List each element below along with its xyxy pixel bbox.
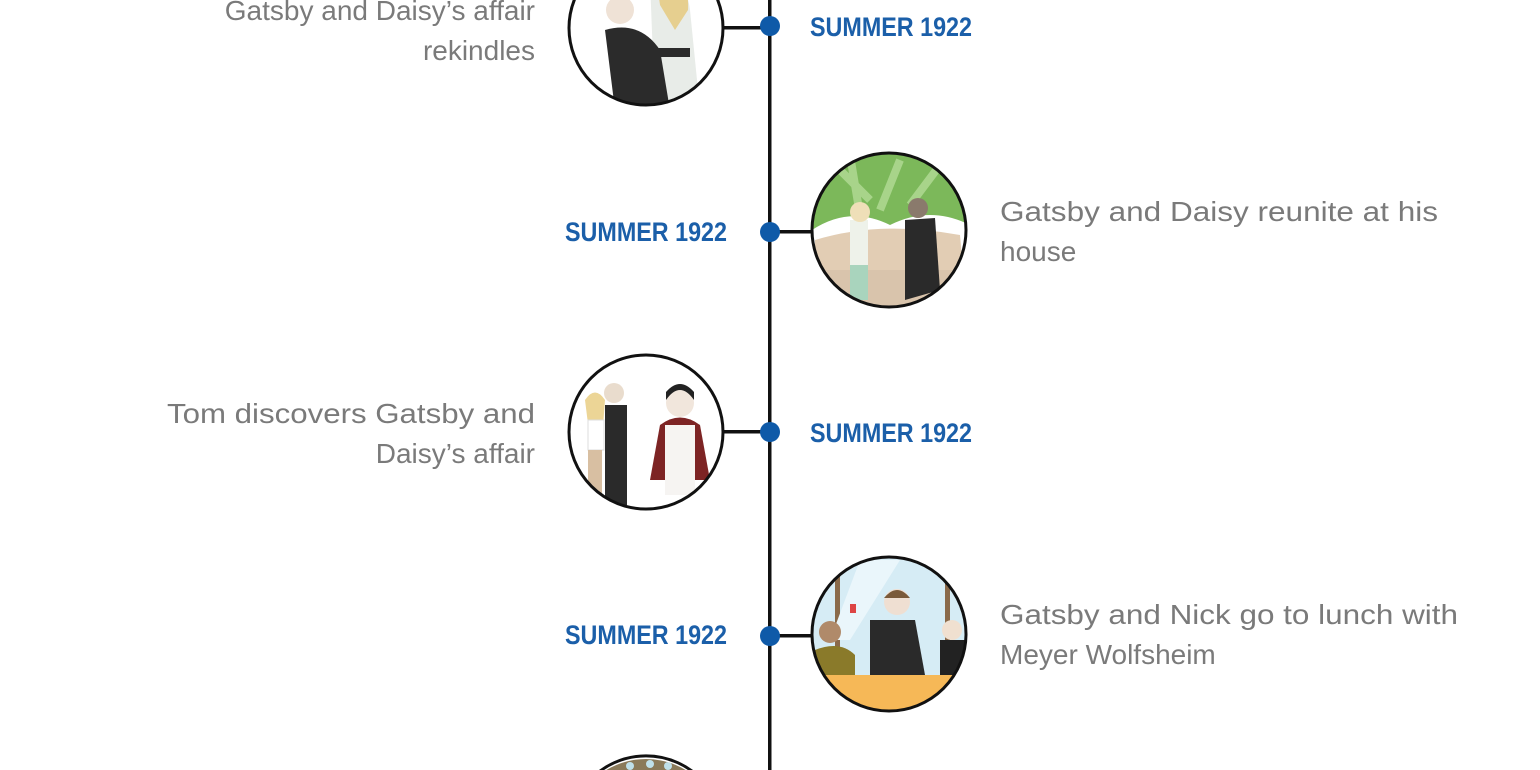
illustration 2: sofa under leaves [814, 154, 964, 306]
text 3: Daisy’s affair [376, 438, 535, 469]
event 4: lunch with Wolfsheim [565, 555, 1458, 715]
dot 2 [760, 222, 780, 242]
text 2: Gatsby and Daisy reunite at his [1000, 196, 1438, 227]
timeline axis [768, 0, 772, 770]
connector 3 [724, 430, 760, 434]
dot 4 [760, 626, 780, 646]
dot 1 [760, 16, 780, 36]
event 1: affair rekindles [225, 0, 972, 110]
date 4: SUMMER 1922 [565, 620, 727, 650]
illustration 4: lunch [814, 558, 964, 710]
text 2: house [1000, 236, 1076, 267]
event 5 circle (partially visible) [599, 754, 693, 770]
illustration 3: couple and waiter [585, 383, 709, 505]
text 4: Gatsby and Nick go to lunch with [1000, 599, 1458, 630]
date 3: SUMMER 1922 [810, 418, 972, 448]
connector 2 [780, 230, 811, 234]
dot 3 [760, 422, 780, 442]
event 2: reunite [565, 150, 1438, 310]
text 1: rekindles [423, 35, 535, 66]
text 4: Meyer Wolfsheim [1000, 639, 1216, 670]
text 3: Tom discovers Gatsby and [167, 398, 535, 429]
illustration 1: embrace [605, 0, 698, 104]
connector 1 [724, 26, 761, 30]
date 1: SUMMER 1922 [810, 12, 972, 42]
event 3: Tom discovers [167, 350, 972, 510]
date 2: SUMMER 1922 [565, 217, 727, 247]
connector 4 [780, 634, 811, 638]
